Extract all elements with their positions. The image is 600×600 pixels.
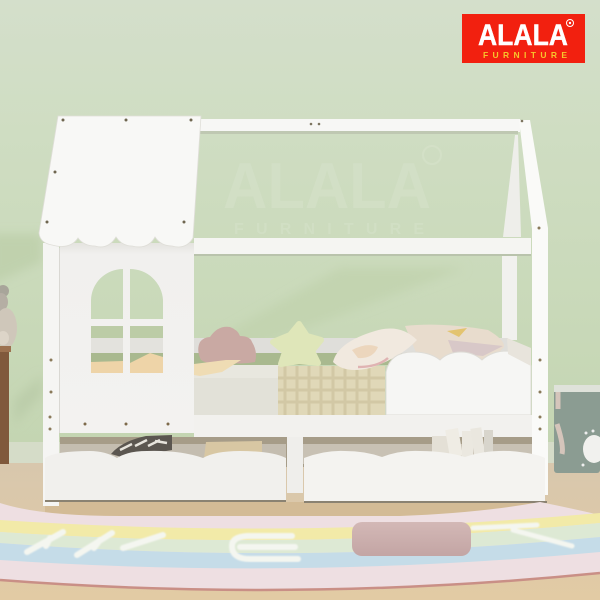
watermark: FURNITURE: [234, 221, 424, 238]
floral pillows: [333, 325, 504, 370]
bed frame: [39, 116, 548, 506]
logo: [462, 14, 585, 63]
dark gap under rail: [194, 353, 508, 365]
window view behind panel: [91, 326, 163, 373]
box in drawer: [204, 441, 262, 458]
left post: [43, 243, 60, 506]
middle rail: [194, 238, 531, 256]
side cabinet: [0, 346, 11, 464]
top rail: [200, 119, 520, 134]
logo: FURNITURE: [483, 50, 567, 60]
rug: [0, 502, 600, 590]
back post and roof beam: [502, 135, 521, 340]
right post and gable beam: [519, 120, 548, 495]
blanket in drawer: [111, 435, 172, 458]
star pillow pink: [198, 327, 256, 364]
books in drawer: [432, 427, 493, 459]
under-bed shadow: [60, 437, 532, 493]
mattress: [194, 365, 385, 415]
right drawer: [304, 451, 547, 503]
blanket on bed: [194, 360, 241, 376]
front rail: [194, 415, 532, 437]
baseboard and floor: [0, 442, 600, 600]
bolster cushion: [352, 522, 471, 556]
star pillow green: [273, 324, 321, 364]
house panel with window: [60, 243, 194, 433]
back guard rail: [194, 338, 508, 353]
side rail at right: [507, 338, 531, 366]
roof panel: [39, 116, 201, 247]
left drawer: [45, 451, 286, 502]
wall background: [0, 0, 600, 445]
storage basket: [554, 385, 600, 473]
cloud guard panel: [386, 351, 531, 415]
watermark: ALALA: [223, 149, 431, 222]
rug letters: [27, 525, 572, 559]
logo: ALALA: [478, 19, 568, 52]
teddy toy: [0, 285, 17, 348]
